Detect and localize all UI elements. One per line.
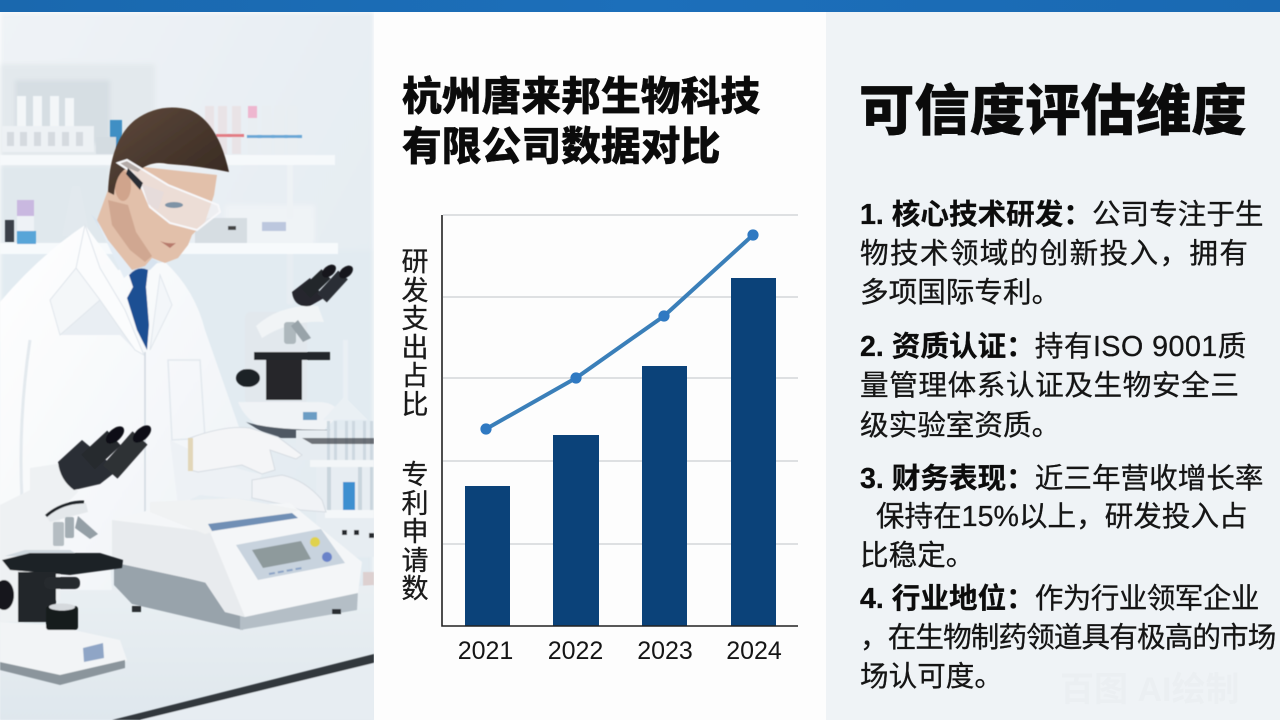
text block: four credibility dimensions: 量管理体系认证及生物安全三 [860,370,1240,402]
text block: four credibility dimensions: 4. 行业地位：作为行业领军企业 [860,583,1259,615]
text block: four credibility dimensions: ，在生物制药领道具有极高的市场 [860,622,1275,654]
axis label: R&D expense share: 研 [402,247,428,277]
line: R&D expense share [480,229,759,435]
text block: four credibility dimensions: 3. 财务表现：近三年营收增长率 [860,463,1264,495]
text block: four credibility dimensions: 多项国际专利。 [860,277,1060,309]
axis label: R&D expense share [402,247,428,420]
shelves with glassware [0,96,338,304]
axis label: R&D expense share: 比 [402,390,428,420]
combo chart: bars and line [441,214,798,665]
front microscope [0,422,154,685]
text block: four credibility dimensions: 级实验室资质。 [860,410,1060,442]
year labels: 2023 [637,637,693,665]
axis label: patent applications: 利 [402,489,428,519]
necktie [127,268,149,350]
year labels: 2024 [726,637,782,665]
axes [442,215,798,626]
safety goggles [118,160,220,230]
hair [108,108,229,195]
axis label: R&D expense share: 支 [402,304,428,334]
year labels: 2022 [548,637,603,665]
axis label: patent applications: 数 [402,574,428,604]
bars: patent applications [465,278,776,626]
panel: middle background [374,12,826,720]
background wall and shelves [0,12,374,720]
axis label: R&D expense share: 出 [402,333,428,363]
axis label: R&D expense share: 发 [402,276,428,306]
panel: laboratory photo [0,12,374,720]
table edge [112,654,374,720]
text block: four credibility dimensions: 保持在15%以上，研发投入占 [876,501,1248,533]
axis label: patent applications [402,460,428,604]
axis label: patent applications: 请 [402,546,428,576]
grid lines [443,215,798,544]
text block: four credibility dimensions: 1. 核心技术研发：公司专注于生 [860,199,1264,231]
mouth [160,241,176,248]
text block: four credibility dimensions [860,199,1275,693]
shirt collar [91,214,158,274]
faint watermark: 百图 AI绘制 [1060,671,1239,709]
heading: chart title: 有限公司数据对比 [402,125,720,169]
text block: four credibility dimensions: 2. 资质认证：持有ISO 9001质 [860,331,1247,363]
axis label: patent applications: 专 [402,460,428,490]
scientist [0,108,262,590]
heading: credibility dimensions: 可信度评估维度 [859,80,1247,142]
year labels: 2021 [458,637,513,665]
ear [115,171,131,201]
white lab coat [0,225,240,590]
heading: chart title: 杭州唐来邦生物科技 [402,75,760,119]
text block: four credibility dimensions: 比稳定。 [860,540,974,572]
axis label: R&D expense share: 占 [402,361,428,391]
year labels [458,637,782,665]
white gloves [188,427,326,512]
right microscope [236,262,368,438]
neck and face [97,165,217,270]
text block: four credibility dimensions: 物技术领域的创新投入，拥有 [860,238,1249,270]
laboratory instrument [112,498,362,630]
text block: four credibility dimensions: 场认可度。 [860,661,1003,693]
test tube rack [296,421,374,586]
table top [0,585,374,720]
axis label: patent applications: 申 [402,517,428,547]
heading: chart title [402,75,760,169]
panel: right background [826,12,1280,720]
top banner bar [0,0,1280,12]
